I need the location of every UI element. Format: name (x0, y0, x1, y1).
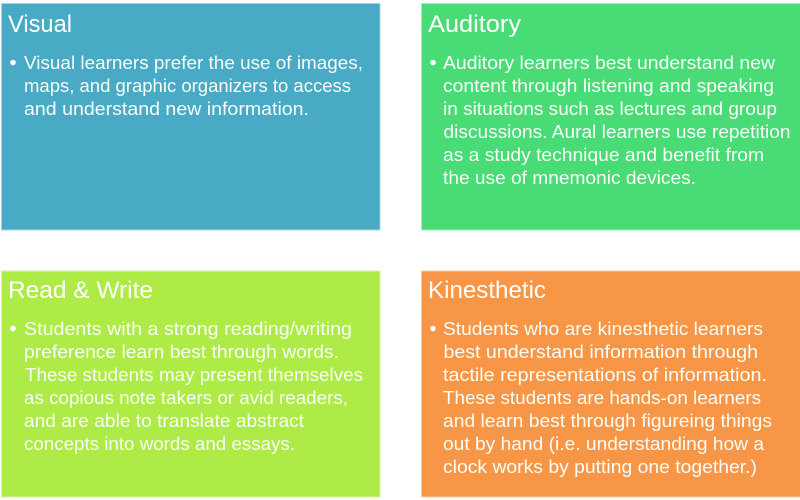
text block: read and write description: as copious note takers or avid readers, (24, 387, 348, 408)
panel: kinesthetic (422, 271, 800, 497)
text block: auditory description (443, 52, 790, 188)
text block: kinesthetic description: tactile representations of information. (443, 364, 767, 385)
text block: auditory description: as a study technique and benefit from (443, 144, 764, 165)
text block: read and write description: Students with a strong reading/writing (24, 318, 352, 339)
text block: auditory description: Auditory learners best understand new (443, 52, 776, 73)
text block: read and write description: concepts into words and essays. (24, 433, 295, 454)
text block: auditory description: in situations such as lectures and group (443, 98, 777, 119)
text block: auditory description: the use of mnemonic devices. (443, 167, 696, 188)
text block: read and write description: and are able to translate abstract (24, 410, 304, 431)
heading: auditory: Auditory (428, 11, 521, 38)
panel: auditory (422, 4, 800, 230)
panel: read and write (2, 271, 380, 497)
text block: visual description (24, 52, 363, 119)
text block: kinesthetic description: Students who are kinesthetic learners (443, 318, 763, 339)
text block: kinesthetic description: and learn best through figureing things (443, 410, 772, 431)
icon: visual bullet (10, 60, 16, 65)
text block: kinesthetic description: These students are hands-on learners (443, 387, 761, 408)
heading: visual: Visual (8, 11, 72, 38)
text block: visual description: maps, and graphic organizers to access (24, 75, 351, 96)
text block: visual description: and understand new information. (24, 98, 309, 119)
heading: kinesthetic: Kinesthetic (428, 277, 546, 304)
text block: kinesthetic description: out by hand (i.e. understanding how a (443, 433, 765, 454)
text block: kinesthetic description (443, 318, 772, 477)
panel: visual (2, 4, 380, 230)
icon: auditory bullet (430, 60, 436, 65)
icon: read and write bullet (10, 326, 16, 331)
text block: visual description: Visual learners prefer the use of images, (24, 52, 363, 73)
text block: read and write description: These students may present themselves (25, 364, 363, 385)
text block: kinesthetic description: best understand information through (444, 341, 758, 362)
text block: read and write description: preference learn best through words. (24, 341, 339, 362)
text block: auditory description: content through listening and speaking (443, 75, 774, 96)
text block: auditory description: discussions. Aural learners use repetition (444, 121, 790, 142)
text block: read and write description (24, 318, 363, 454)
icon: kinesthetic bullet (430, 326, 436, 331)
heading: read and write: Read & Write (8, 277, 153, 304)
text block: kinesthetic description: clock works by putting one together.) (443, 456, 757, 477)
